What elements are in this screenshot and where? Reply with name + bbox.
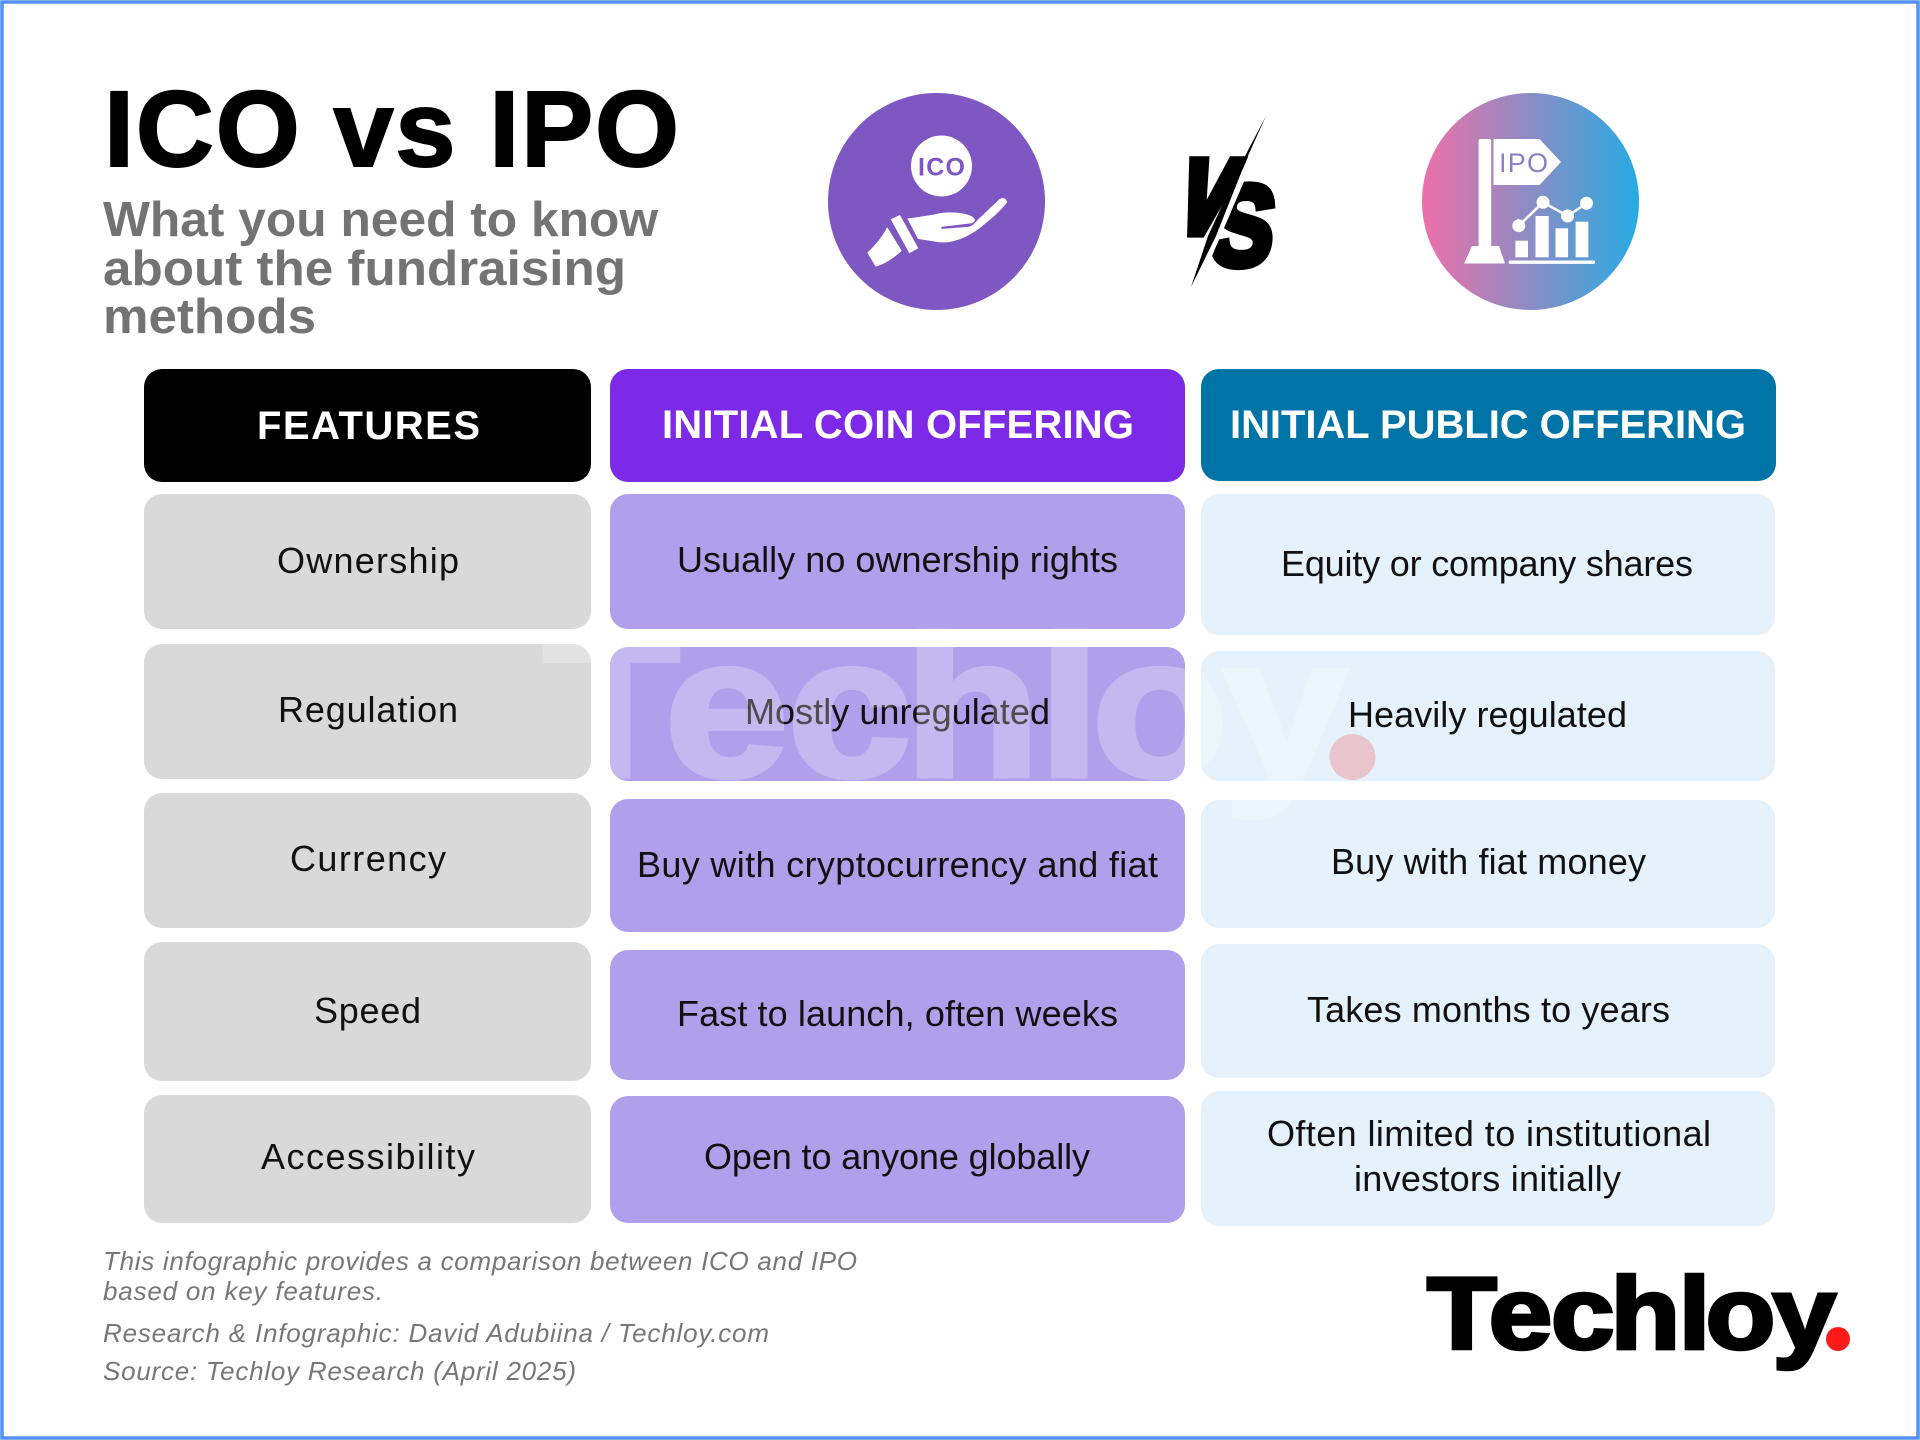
- icon: IPO signpost and chart: [1422, 93, 1639, 310]
- cell: ownership: Usually no ownership rights: [677, 539, 1118, 580]
- footer notes: [103, 1246, 857, 1386]
- icon: VS: [1187, 116, 1276, 287]
- cell: currency: Buy with fiat money: [1331, 841, 1646, 882]
- icon: ICO coin in hand: ICO: [918, 154, 965, 182]
- cell: accessibility: investors initially: [1354, 1158, 1621, 1199]
- watermark: Techloy: Techloy: [543, 595, 1348, 818]
- cell: regulation: [1201, 651, 1775, 781]
- cell: speed: Takes months to years: [1307, 989, 1670, 1030]
- cell: accessibility: Often limited to institutional: [1267, 1113, 1711, 1154]
- cell: ownership: [1201, 494, 1775, 635]
- header: features: FEATURES: [257, 404, 480, 448]
- panel: IPO column: [1201, 369, 1776, 1226]
- footer notes: This infographic provides a comparison between ICO and IPO: [103, 1246, 857, 1276]
- cell: regulation: Heavily regulated: [1348, 694, 1627, 735]
- header: initial coin offering: INITIAL COIN OFFERING: [662, 403, 1134, 447]
- panel: features column: [144, 369, 591, 1223]
- row: regulation: Regulation: [278, 689, 458, 730]
- cell: ownership: [610, 494, 1185, 629]
- cell: speed: Fast to launch, often weeks: [677, 993, 1118, 1034]
- row: currency: [144, 793, 591, 928]
- row: accessibility: [144, 1095, 591, 1223]
- cell: currency: [610, 799, 1185, 932]
- subtitle: methods: [103, 290, 316, 344]
- cell: accessibility: [610, 1096, 1185, 1223]
- row: currency: Currency: [290, 838, 446, 879]
- cell: regulation: Mostly unregulated: [745, 691, 1050, 732]
- row: speed: [144, 942, 591, 1081]
- icon: ICO coin in hand: [828, 93, 1045, 310]
- subtitle: What you need to know: [103, 193, 659, 247]
- cell: currency: Buy with cryptocurrency and fiat: [637, 844, 1158, 885]
- cell: regulation: [610, 647, 1185, 781]
- footer notes: Source: Techloy Research (April 2025): [103, 1356, 576, 1386]
- cell: speed: [610, 950, 1185, 1080]
- footer notes: based on key features.: [103, 1276, 383, 1306]
- row: ownership: Ownership: [277, 540, 459, 581]
- icon: VS: S: [1205, 162, 1282, 290]
- subtitle: [103, 193, 659, 344]
- header: initial public offering: [1201, 369, 1776, 481]
- cell: accessibility: [1201, 1091, 1775, 1226]
- cell: speed: [1201, 944, 1775, 1078]
- logo: Techloy: Techloy: [1427, 1256, 1836, 1370]
- row: speed: Speed: [314, 990, 421, 1031]
- subtitle: about the fundraising: [103, 242, 626, 296]
- icon: VS: V: [1165, 140, 1250, 254]
- icon: IPO signpost and chart: IPO: [1499, 148, 1548, 178]
- cell: ownership: Equity or company shares: [1281, 543, 1693, 584]
- header: initial coin offering: [610, 369, 1185, 482]
- cell: accessibility: Open to anyone globally: [704, 1136, 1090, 1177]
- header: features: [144, 369, 591, 482]
- row: accessibility: Accessibility: [261, 1136, 475, 1177]
- title: ICO vs IPO: [104, 68, 679, 189]
- row: ownership: [144, 494, 591, 629]
- cell: currency: [1201, 800, 1775, 928]
- panel: ICO column: [610, 369, 1185, 1223]
- row: regulation: [144, 644, 591, 779]
- header: initial public offering: INITIAL PUBLIC OFFERING: [1230, 403, 1746, 447]
- footer notes: Research & Infographic: David Adubiina / Techloy.com: [103, 1318, 769, 1348]
